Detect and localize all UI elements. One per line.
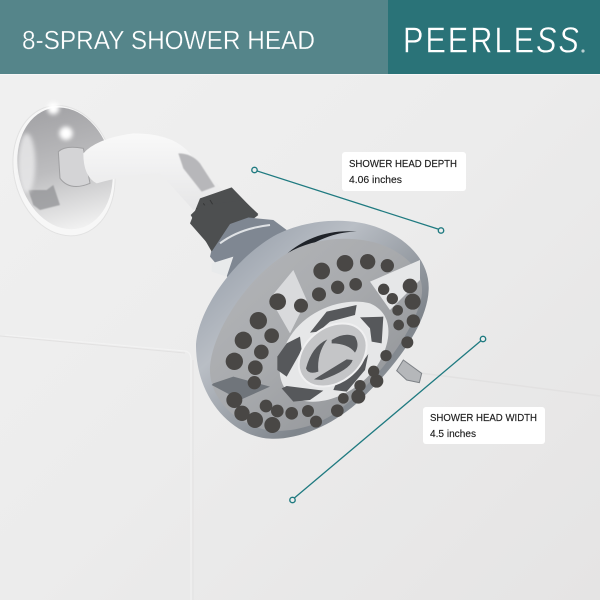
dimension line: width bbox=[290, 336, 486, 503]
dimension line: depth bbox=[252, 167, 444, 233]
label: shower head depth: 4.06 inches bbox=[349, 174, 402, 186]
label: shower head width bbox=[423, 407, 545, 444]
center ring and nozzles bbox=[286, 310, 379, 400]
title: 8-SPRAY SHOWER HEAD bbox=[22, 27, 315, 55]
center plate bbox=[280, 302, 388, 402]
spray nozzles bbox=[226, 254, 421, 433]
selector lever bbox=[397, 360, 422, 383]
coupling nut bbox=[190, 187, 258, 250]
label: shower head depth bbox=[342, 152, 466, 191]
header band bbox=[0, 0, 600, 75]
body rim bbox=[196, 221, 429, 439]
neck bbox=[210, 217, 287, 280]
face bbox=[210, 239, 422, 431]
nut part bbox=[191, 200, 258, 252]
label: shower head width: SHOWER HEAD WIDTH bbox=[430, 412, 537, 424]
logo: Peerless: PEERLESS bbox=[403, 20, 581, 60]
label: shower head depth: SHOWER HEAD DEPTH bbox=[349, 158, 457, 170]
icon: wall flange and shower arm bbox=[0, 95, 258, 250]
icon: shower head bbox=[191, 200, 429, 439]
label: shower head width: 4.5 inches bbox=[430, 428, 476, 440]
